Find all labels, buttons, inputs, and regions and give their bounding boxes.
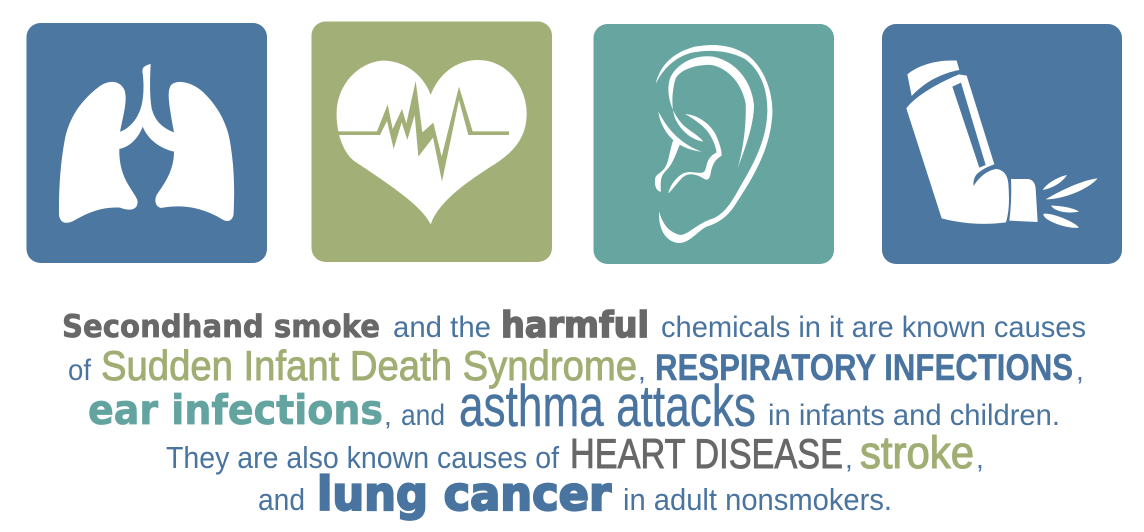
line 3 of caption: , (384, 400, 392, 431)
line 5 of caption: and (258, 482, 305, 517)
line 5 of caption: in adult nonsmokers. (623, 482, 892, 517)
line 4 of caption (166, 427, 984, 478)
line 4 of caption: stroke (860, 427, 974, 478)
panel: heart (312, 22, 552, 262)
line 1 of caption: chemicals in it are known causes (661, 311, 1086, 344)
line 3 of caption: in infants and children. (768, 399, 1060, 432)
icon: lungs (59, 64, 234, 223)
line 2 of caption: , (1076, 355, 1084, 386)
line 2 of caption: of (68, 354, 92, 387)
icon: ear (655, 45, 772, 243)
line 4 of caption: HEART DISEASE (570, 430, 843, 477)
icon: heart with pulse line (337, 60, 527, 224)
caption text block (62, 305, 1086, 521)
icon: inhaler with spray (906, 60, 1098, 228)
panel: ear (594, 24, 834, 264)
line 2 of caption (68, 342, 1084, 389)
line 4 of caption: They are also known causes of (166, 440, 559, 475)
line 1 of caption: and the (393, 311, 491, 344)
line 3 of caption (88, 374, 1060, 439)
line 4 of caption: , (845, 443, 853, 474)
line 3 of caption: and (401, 399, 445, 432)
line 5 of caption (258, 467, 892, 521)
panel: inhaler (882, 24, 1122, 264)
line 3 of caption: ear infections (88, 386, 383, 434)
line 4 of caption: , (976, 443, 984, 474)
line 3 of caption: asthma attacks (459, 374, 756, 439)
line 1 of caption: harmful (501, 305, 649, 346)
line 1 of caption: Secondhand smoke (62, 309, 380, 345)
line 2 of caption: RESPIRATORY INFECTIONS (655, 347, 1073, 388)
line 2 of caption: Sudden Infant Death Syndrome (101, 342, 637, 389)
line 5 of caption: lung cancer (317, 467, 611, 521)
panel: lungs (26, 23, 267, 263)
line 1 of caption (62, 305, 1086, 346)
line 2 of caption: , (638, 355, 646, 386)
